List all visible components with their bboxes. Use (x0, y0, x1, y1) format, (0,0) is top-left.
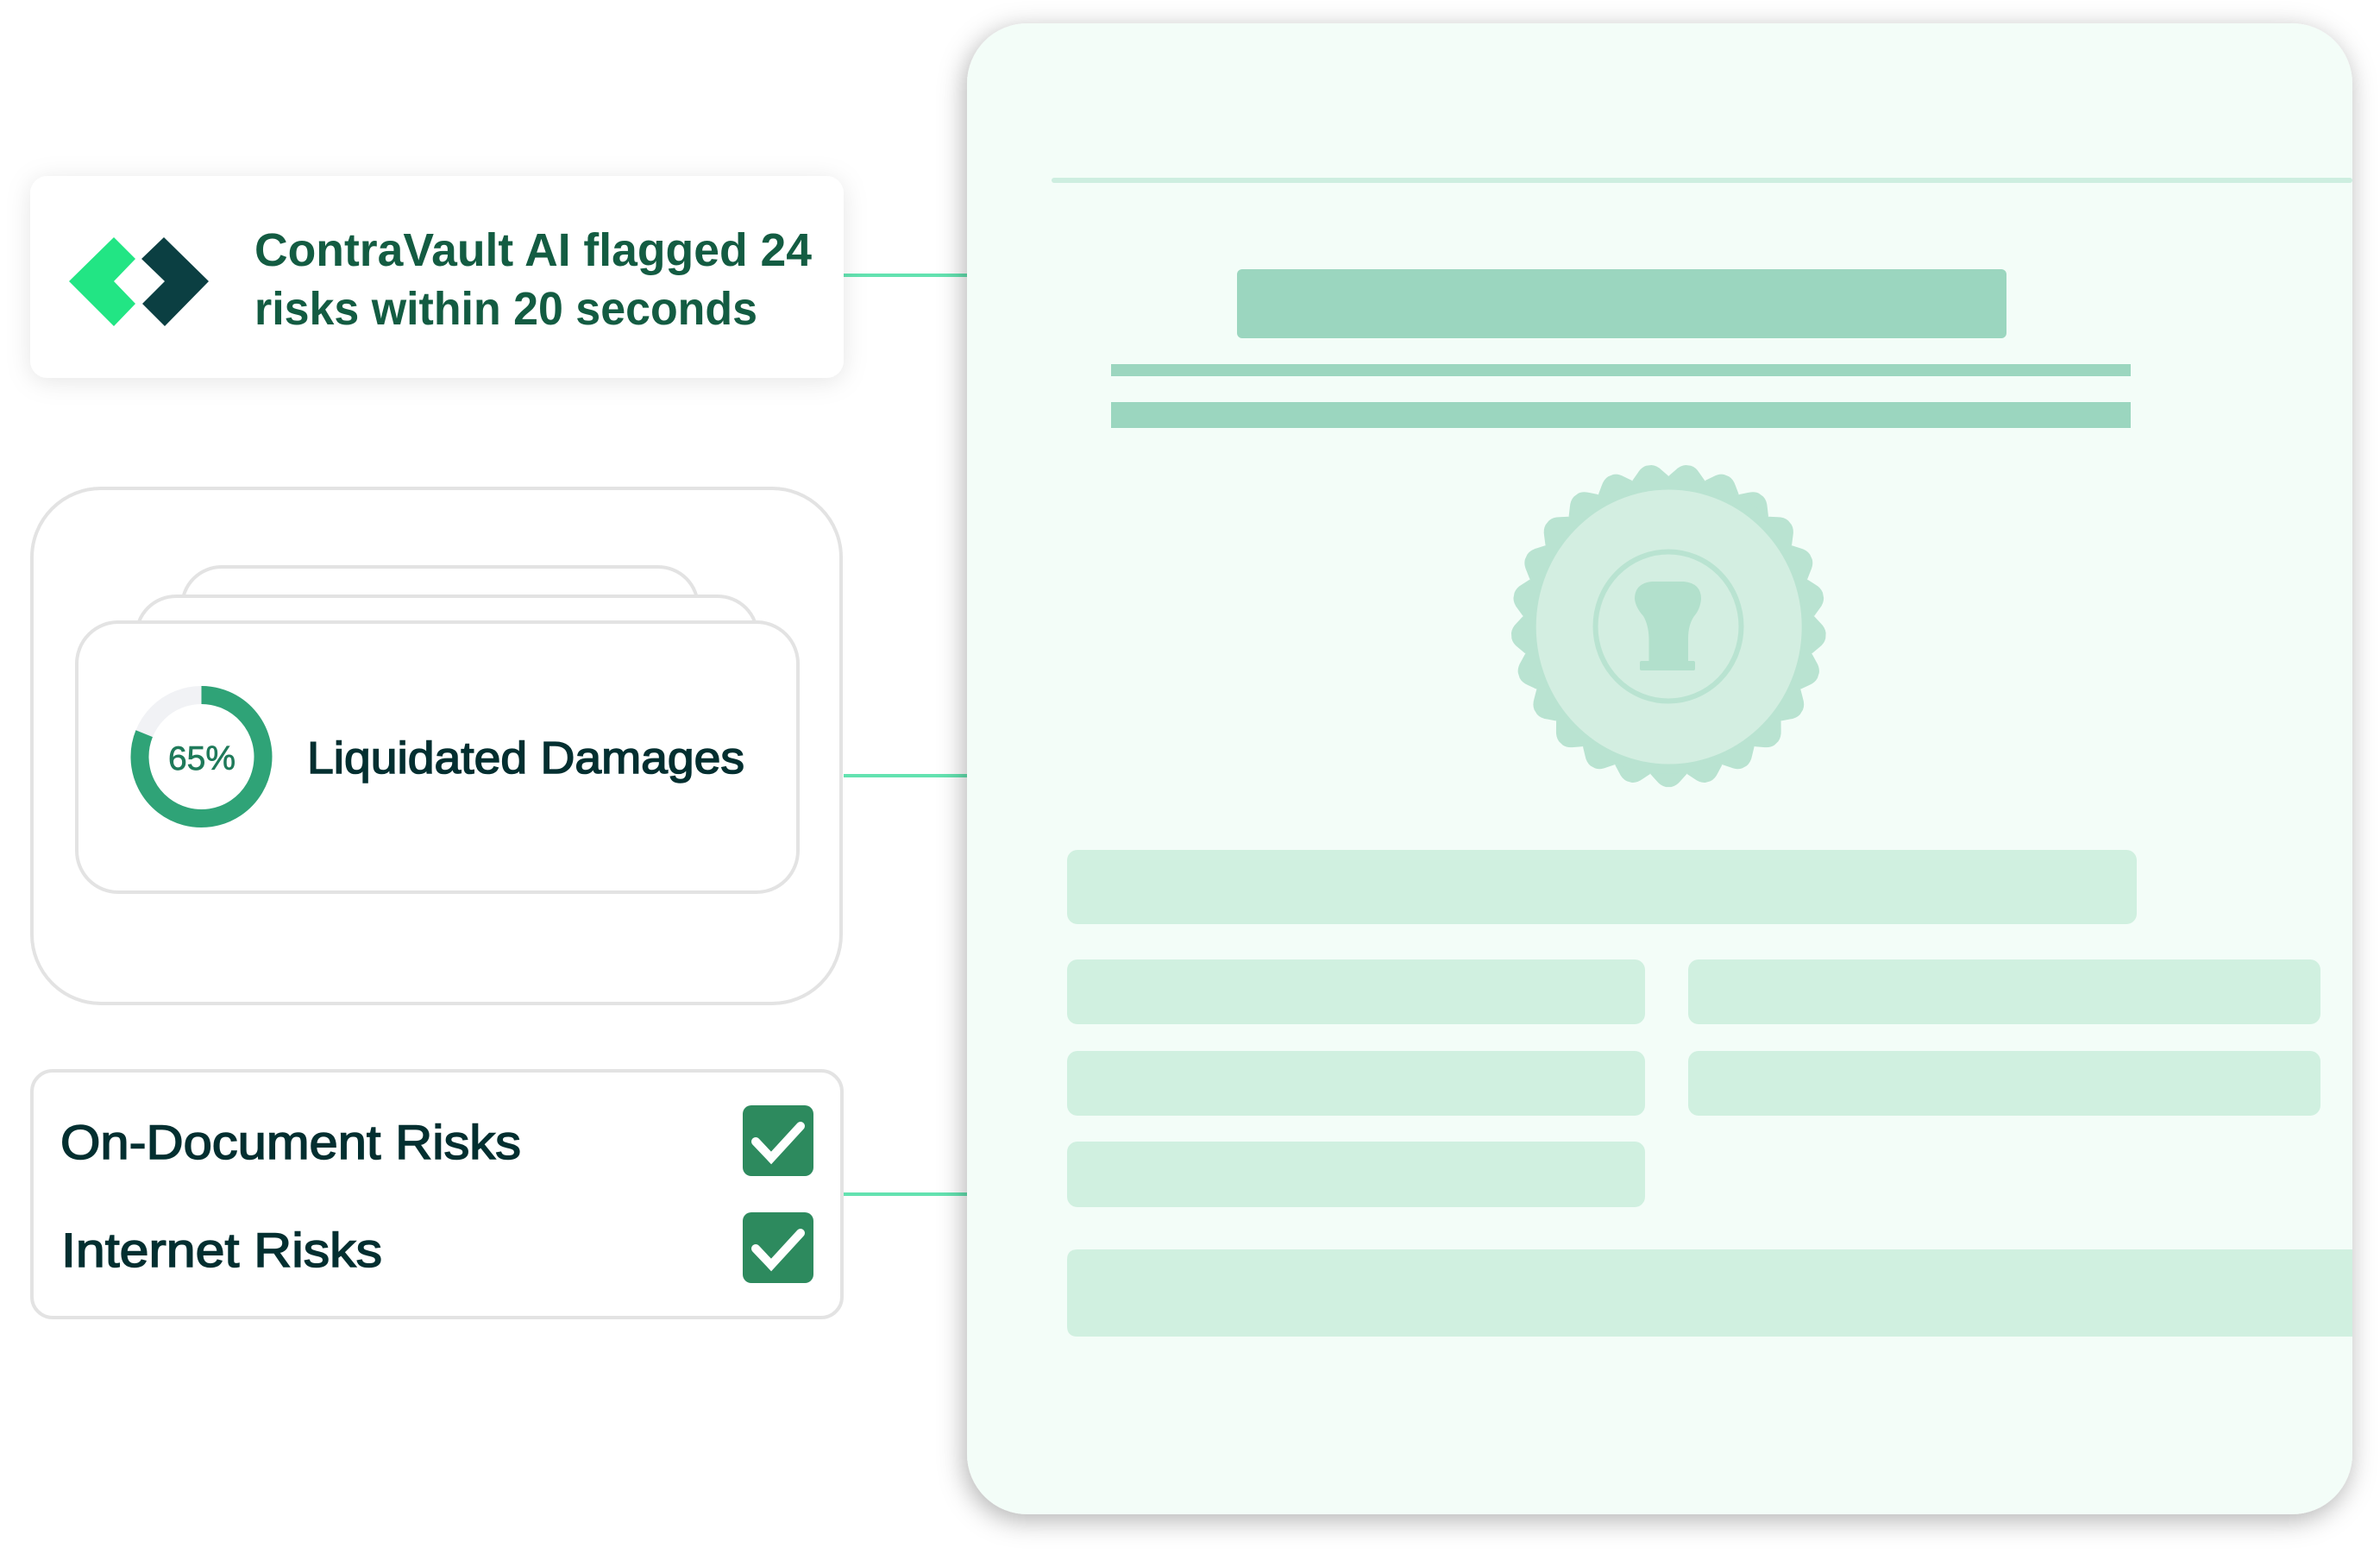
seal scalloped edge (1510, 463, 1827, 787)
row: on-document risks: On-Document Risks (60, 1115, 521, 1169)
panel: risk checklist (32, 1071, 842, 1318)
document left column blocks (1067, 959, 1645, 1207)
callout: flagged risks (30, 176, 844, 378)
row: internet risks: Internet Risks (61, 1223, 382, 1277)
document right column blocks (1688, 959, 2320, 1116)
checklist frame (32, 1071, 842, 1318)
seal ring (1596, 552, 1741, 701)
document bottom block (1067, 1249, 2352, 1337)
outer frame (32, 488, 841, 1003)
document subtitle bars (1111, 364, 2131, 428)
icon: certification seal (1510, 463, 1827, 787)
row: internet risks (61, 1212, 813, 1283)
donut chart: 65%: 65% (168, 740, 235, 777)
icon: checkbox (743, 1212, 813, 1283)
callout text: ContraVault AI flagged 24 (254, 224, 812, 276)
connector lines (844, 274, 969, 1196)
back card 3 (182, 567, 698, 670)
row: on-document risks (60, 1105, 813, 1176)
document background (967, 23, 2352, 1514)
panel: document (967, 23, 2352, 1514)
panel: liquidated damages (32, 488, 841, 1003)
document top rule (1052, 178, 2352, 183)
icon: ContraVault logo (69, 237, 209, 326)
callout card (30, 176, 844, 378)
label: Liquidated Damages (307, 733, 744, 783)
seal inner disc (1536, 490, 1802, 764)
callout text: risks within 20 seconds (254, 283, 757, 335)
donut chart: 65% (140, 695, 263, 818)
back card 2 (136, 596, 757, 700)
document full width block (1067, 850, 2137, 924)
document title bar (1237, 269, 2006, 338)
front card (77, 622, 798, 892)
icon: stamp (1635, 582, 1701, 670)
icon: checkbox (743, 1105, 813, 1176)
